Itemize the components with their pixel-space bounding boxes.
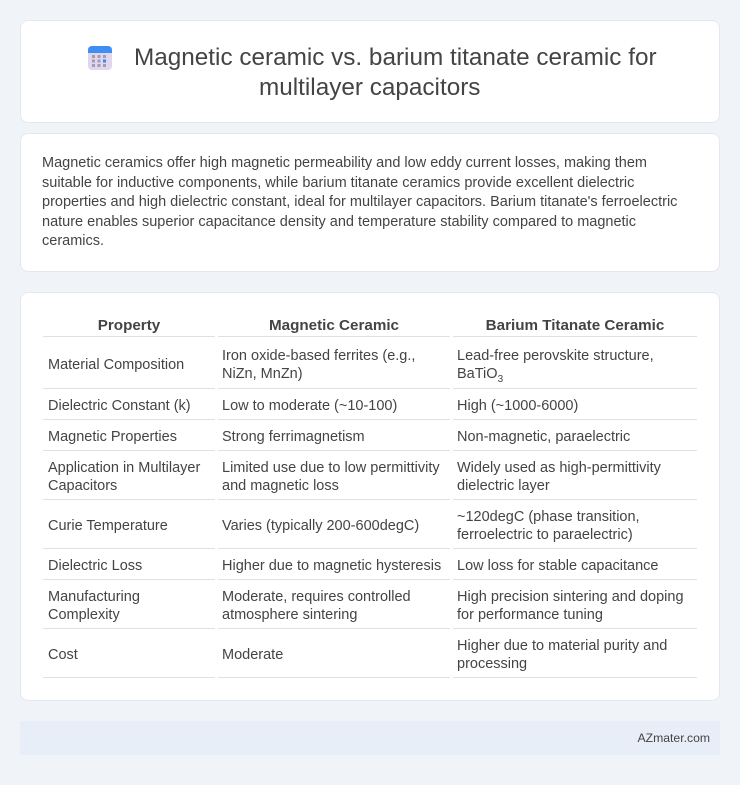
row: manufacturing complexity: atmosphere sintering — [222, 607, 357, 623]
row: material composition: Material Composition — [48, 357, 184, 373]
row: material composition: Iron oxide-based ferrites (e.g., — [222, 348, 415, 364]
row: application: Limited use due to low permittivity — [222, 460, 440, 476]
row: manufacturing complexity — [48, 589, 684, 623]
row: application: Application in Multilayer — [48, 460, 200, 476]
summary text: Magnetic ceramics offer high magnetic permeability and low eddy current losses, making them — [42, 155, 647, 171]
row: dielectric constant: High (~1000-6000) — [457, 398, 578, 414]
icon: calendar — [88, 46, 112, 70]
row: cost: Moderate — [222, 647, 283, 663]
row: application: dielectric layer — [457, 478, 550, 494]
row: cost: Higher due to material purity and — [457, 638, 667, 654]
panel: comparison table — [20, 292, 720, 701]
row: curie temperature: ferroelectric to paraelectric) — [457, 527, 633, 543]
row: cost: Cost — [48, 647, 78, 663]
row: dielectric loss: Low loss for stable capacitance — [457, 558, 658, 574]
row: dielectric loss: Dielectric Loss — [48, 558, 142, 574]
row: application: Capacitors — [48, 478, 117, 494]
summary text: nature enables superior capacitance density and temperature stability compared to magnetic — [42, 214, 636, 230]
row: cost — [48, 638, 667, 672]
row: material composition — [48, 348, 654, 385]
row: curie temperature — [48, 509, 640, 543]
title card — [20, 20, 720, 123]
row: magnetic properties: Strong ferrimagnetism — [222, 429, 365, 445]
row: manufacturing complexity: High precision sintering and doping — [457, 589, 684, 605]
row: dielectric loss: Higher due to magnetic hysteresis — [222, 558, 441, 574]
row: magnetic properties: Non-magnetic, paraelectric — [457, 429, 630, 445]
row: curie temperature: ~120degC (phase transition, — [457, 509, 640, 525]
panel: summary — [20, 133, 720, 272]
row: material composition: Lead-free perovskite structure, — [457, 348, 654, 364]
row: dielectric constant — [48, 398, 578, 414]
table header — [98, 317, 664, 334]
summary text — [42, 155, 677, 249]
row: cost: processing — [457, 656, 527, 672]
row: material composition: NiZn, MnZn) — [222, 366, 303, 382]
row: magnetic properties: Magnetic Properties — [48, 429, 177, 445]
row: manufacturing complexity: for performance tuning — [457, 607, 603, 623]
row: dielectric constant: Low to moderate (~10-100) — [222, 398, 397, 414]
row: manufacturing complexity: Moderate, requires controlled — [222, 589, 411, 605]
footer bar — [20, 721, 720, 755]
row: manufacturing complexity: Manufacturing — [48, 589, 140, 605]
row: material composition: BaTiO3 — [457, 366, 503, 385]
row: magnetic properties — [48, 429, 630, 445]
row: dielectric constant: Dielectric Constant (k) — [48, 398, 191, 414]
title: multilayer capacitors — [259, 74, 480, 101]
table header: Barium Titanate Ceramic — [486, 317, 664, 334]
title — [134, 44, 657, 101]
row: dielectric loss — [48, 558, 658, 574]
summary text: suitable for inductive components, while barium titanate ceramics provide excellent dielectric — [42, 174, 634, 190]
footer text: AZmater.com — [638, 731, 710, 745]
table header: Property — [98, 317, 160, 334]
row: application: and magnetic loss — [222, 478, 339, 494]
row: manufacturing complexity: Complexity — [48, 607, 120, 623]
row: application: Widely used as high-permittivity — [457, 460, 661, 476]
row: application — [48, 460, 661, 494]
row: curie temperature: Curie Temperature — [48, 518, 168, 534]
title: Magnetic ceramic vs. barium titanate ceramic for — [134, 44, 657, 71]
summary text: properties and high dielectric constant, ideal for multilayer capacitors. Barium titanate's ferroelectric — [42, 194, 677, 210]
summary text: ceramics. — [42, 233, 104, 249]
row: curie temperature: Varies (typically 200-600degC) — [222, 518, 419, 534]
table header: Magnetic Ceramic — [269, 317, 399, 334]
